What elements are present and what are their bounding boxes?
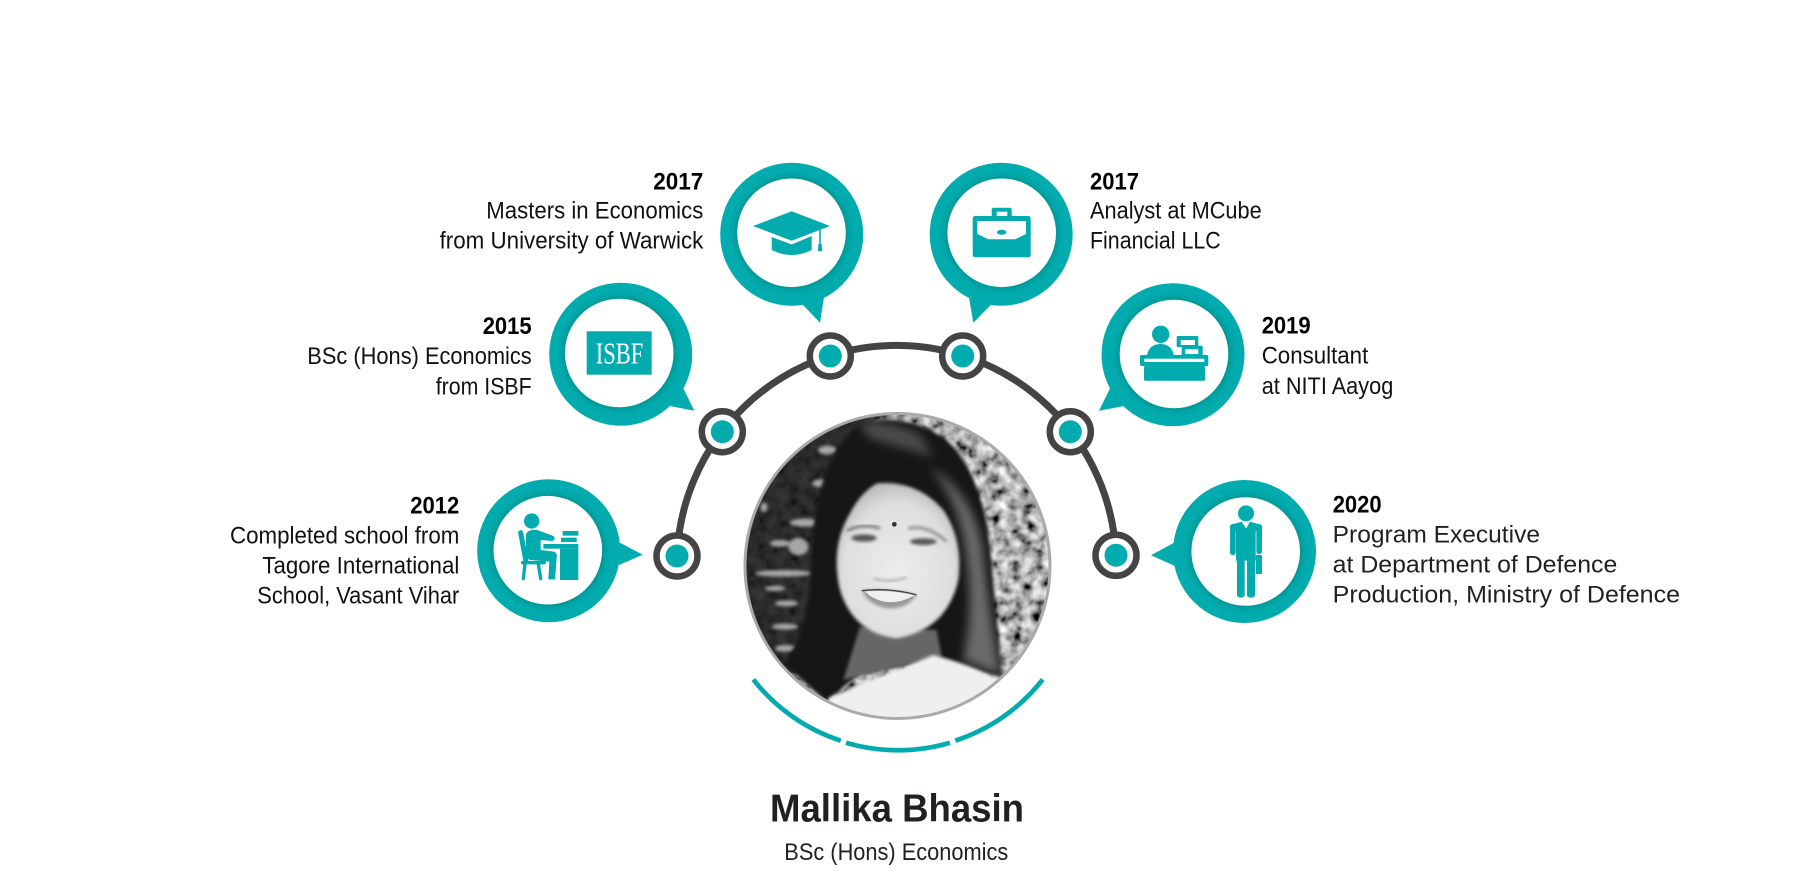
text: 2017 analyst: Financial LLC (1090, 228, 1221, 255)
text: 2020 defence: 2020 (1333, 492, 1382, 519)
segmented teal arc under portrait (753, 680, 1043, 750)
bubble: 2020 defence (1151, 480, 1316, 623)
text: 2017 analyst: 2017 (1090, 168, 1139, 195)
bubble: 2012 school (477, 479, 643, 622)
name heading: Mallika Bhasin (770, 788, 1024, 831)
text: 2019 consultant (1262, 312, 1393, 400)
bubble: 2015 ISBF (549, 283, 694, 426)
icon: man in suit (1230, 505, 1262, 598)
timeline arc (677, 345, 1116, 556)
text: 2015 ISBF: BSc (Hons) Economics (307, 343, 532, 370)
text: 2012 school: Completed school from (230, 522, 459, 549)
text: 2012 school: School, Vasant Vihar (257, 582, 459, 609)
text: 2012 school: 2012 (410, 492, 459, 519)
text: 2017 analyst (1090, 168, 1262, 255)
text: 2015 ISBF: 2015 (483, 313, 532, 340)
text: 2020 defence: at Department of Defence (1333, 552, 1617, 579)
bubble: 2019 consultant (1099, 283, 1244, 426)
timeline node: 2012 (656, 536, 698, 576)
icon: student at desk (521, 513, 578, 580)
icon: graduation cap (753, 211, 830, 255)
icon: person at desk (1140, 326, 1208, 381)
timeline node: 2015 (702, 411, 743, 452)
text: 2012 school: Tagore International (262, 552, 459, 579)
text: 2020 defence (1333, 492, 1680, 609)
text: 2017 analyst: Analyst at MCube (1090, 198, 1262, 225)
portrait photo (737, 407, 1052, 723)
text: 2017 masters (440, 168, 704, 255)
icon: ISBF logo (587, 331, 652, 375)
timeline node: 2019 (1050, 411, 1091, 452)
text: 2017 masters: from University of Warwick (440, 228, 704, 255)
timeline node: 2017 analyst (942, 336, 983, 376)
timeline node: 2017 masters (810, 336, 851, 376)
bubble: 2017 masters (720, 163, 863, 323)
text: 2020 defence: Production, Ministry of Defence (1333, 582, 1680, 609)
icon: ISBF logo: ISBF (596, 335, 643, 370)
timeline node: 2020 (1096, 535, 1136, 576)
text: 2015 ISBF: from ISBF (436, 374, 532, 400)
text: 2019 consultant: Consultant (1262, 342, 1369, 370)
text: 2020 defence: Program Executive (1333, 522, 1540, 549)
bubble: 2017 analyst (930, 163, 1073, 323)
degree subtitle: BSc (Hons) Economics (784, 839, 1008, 866)
text: 2019 consultant: 2019 (1262, 312, 1311, 340)
text: 2017 masters: Masters in Economics (486, 198, 703, 225)
icon: briefcase (973, 208, 1031, 257)
text: 2017 masters: 2017 (653, 168, 703, 195)
text: 2015 ISBF (307, 313, 532, 400)
text: 2019 consultant: at NITI Aayog (1262, 373, 1393, 400)
text: 2012 school (230, 492, 459, 609)
